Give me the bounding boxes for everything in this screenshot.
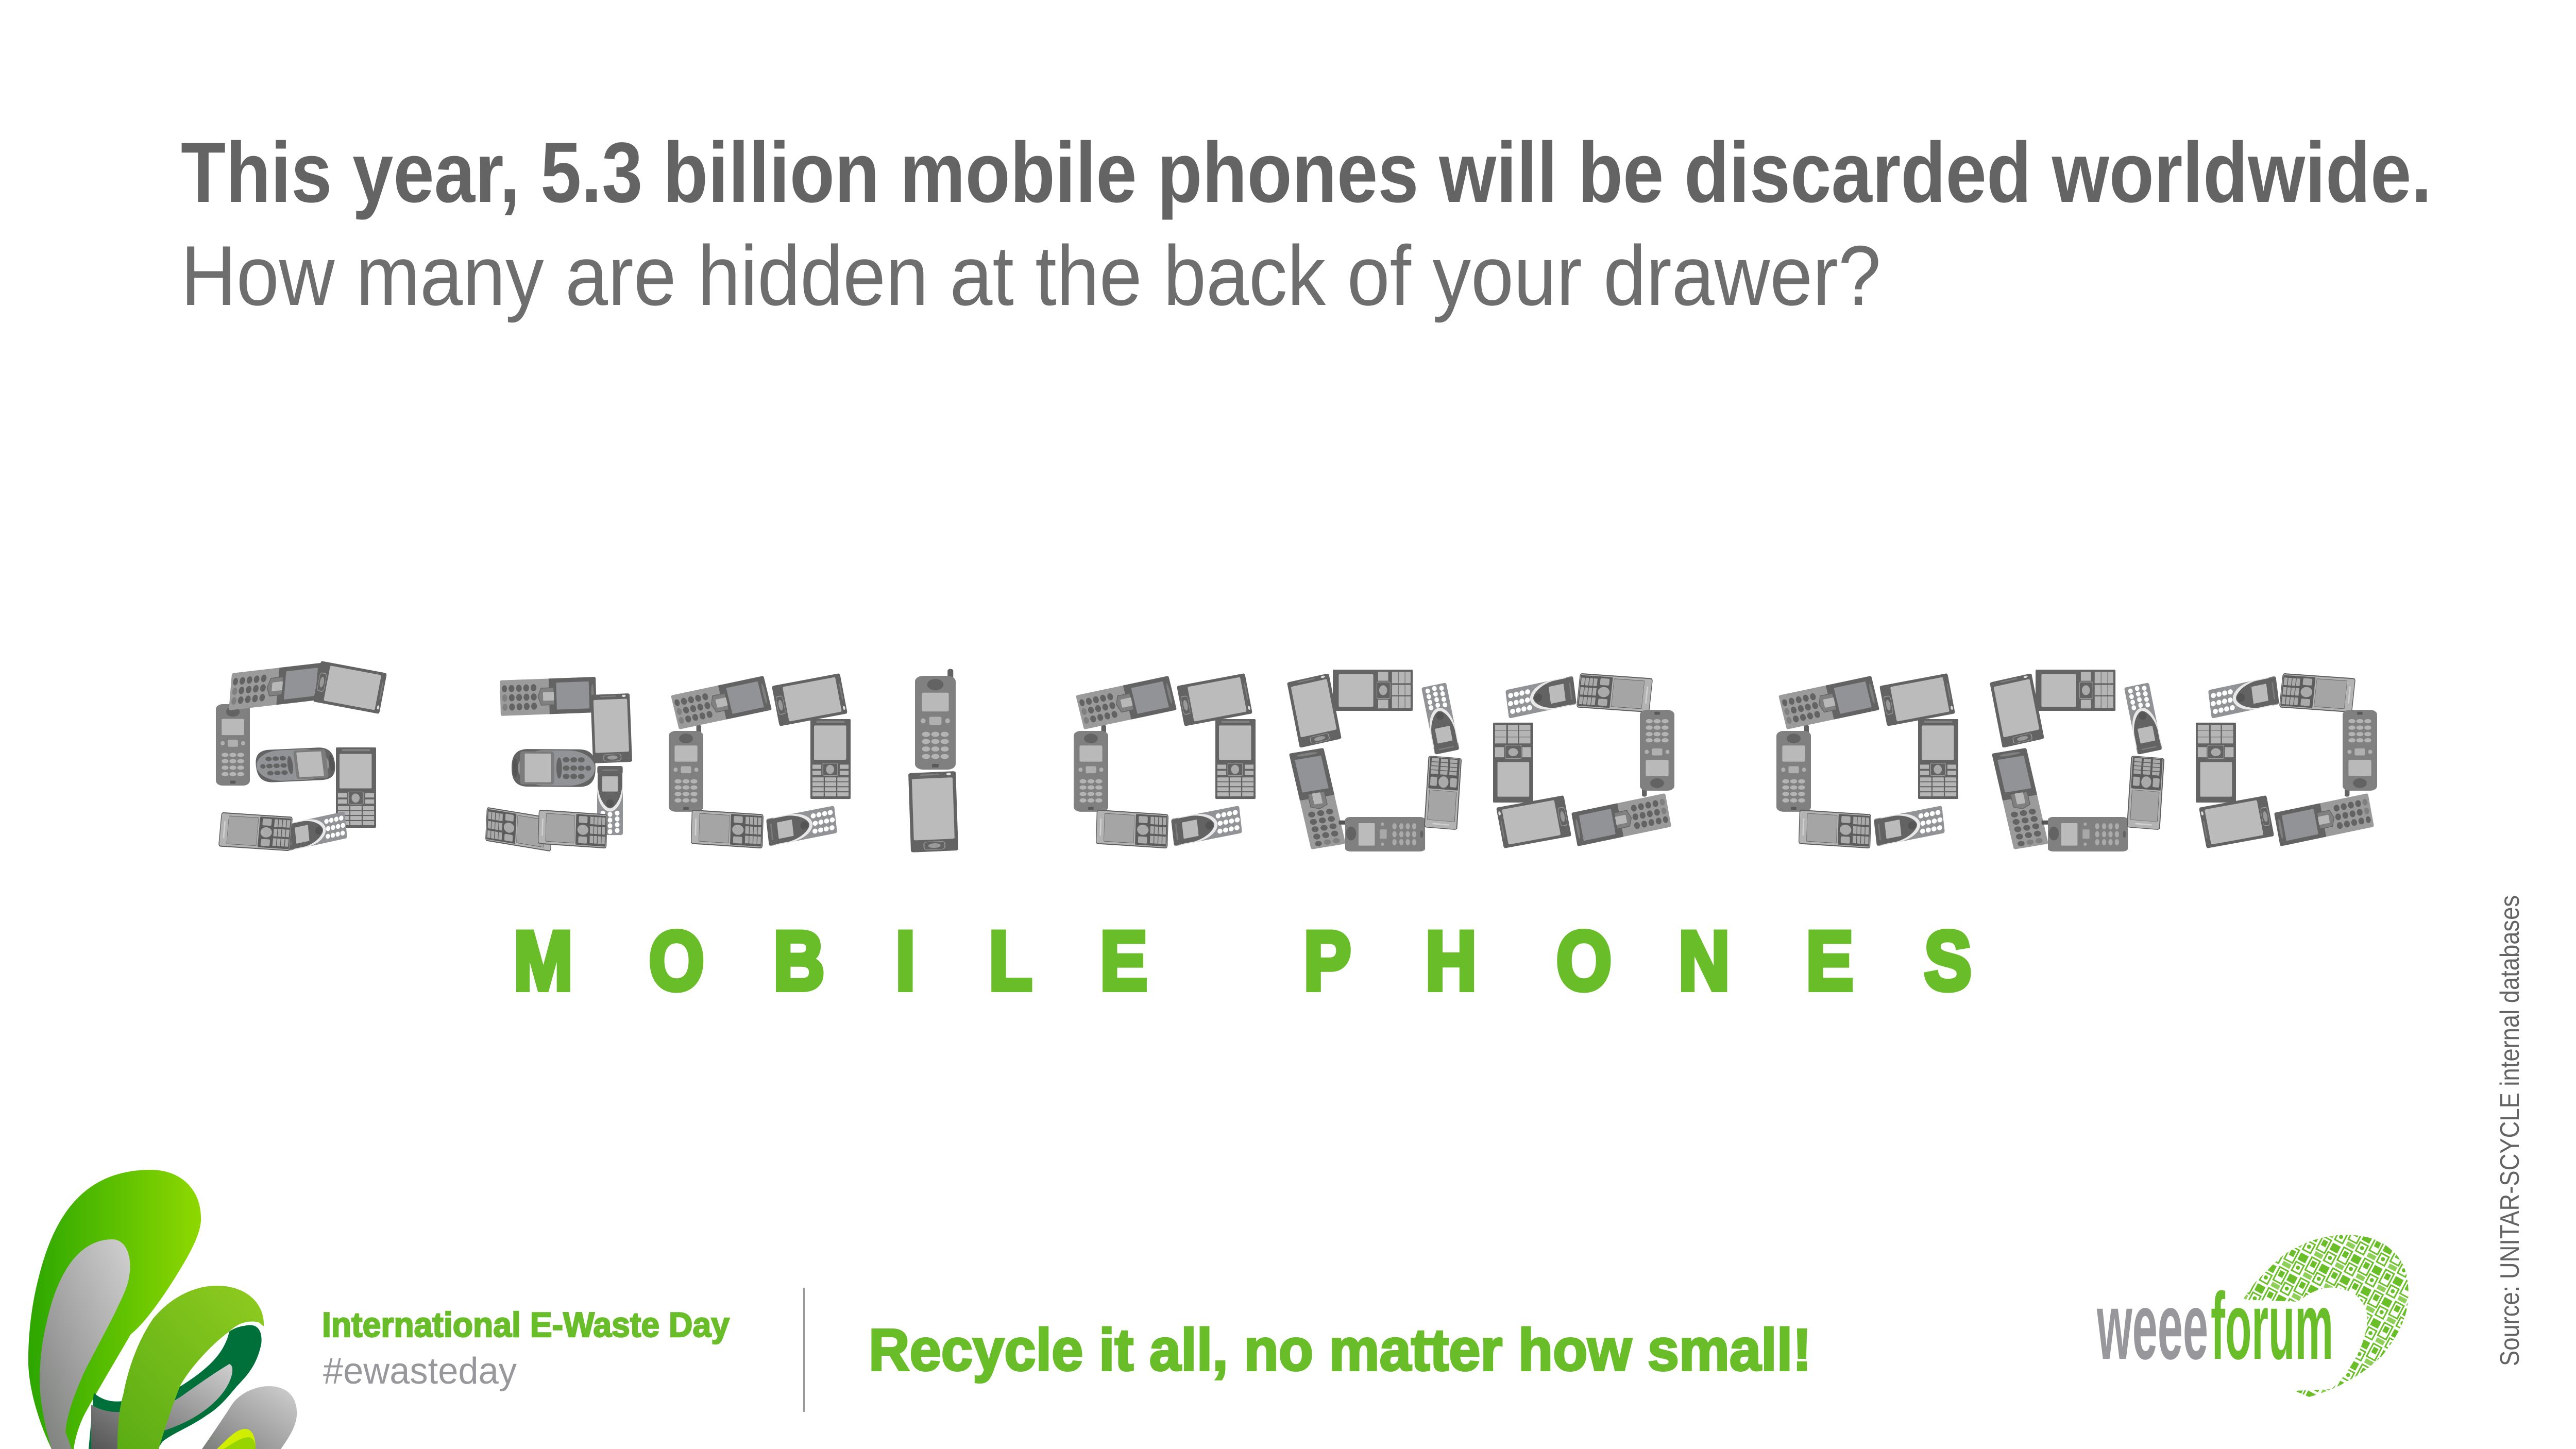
gray third blade — [202, 1386, 297, 1449]
digit 0, second thousands group middle — [1990, 670, 2164, 851]
digit 1 — [908, 669, 958, 853]
big green leaf — [28, 1170, 201, 1449]
phone: oval handset — [254, 747, 337, 783]
text: International E-Waste Day: International E-Waste Day — [322, 1305, 730, 1344]
lime tip inner — [224, 1437, 256, 1449]
label: MOBILE PHONES: MOBILE PHONES — [514, 914, 1972, 1007]
second green leaf — [117, 1286, 264, 1449]
slogan: Recycle it all, no matter how small! — [869, 1317, 1811, 1383]
icon: WEEE Forum logo — [2097, 1235, 2409, 1397]
phone: slider — [229, 662, 325, 710]
digit 0, second thousands group last — [2196, 674, 2377, 848]
digit 0 — [669, 673, 851, 848]
phone: slider — [500, 677, 597, 716]
phone: side keypad rear — [486, 808, 552, 851]
digit 0, second thousands group — [1776, 673, 1958, 848]
source note: Source: UNITAR-SCYCLE internal databases — [2495, 895, 2525, 1366]
number made of phones: 5 301 000 000 — [216, 661, 2377, 853]
lime tip — [217, 1429, 256, 1449]
digit 0, first thousands group middle — [1287, 670, 1461, 851]
gray ring interior — [91, 1364, 232, 1449]
phone: smartphone — [313, 661, 387, 714]
icon: WEEE Forum logo: forum — [2211, 1273, 2333, 1379]
dark green ring — [89, 1325, 262, 1449]
phone: smartphone — [590, 693, 632, 763]
phone: side keypad — [219, 813, 292, 850]
text: hashtag: #ewasteday — [323, 1351, 517, 1392]
phone: side keypad front — [538, 810, 607, 848]
subtitle: question: How many are hidden at the back of your drawer? — [181, 228, 1881, 323]
digit 3 — [486, 677, 632, 851]
phone: oval handset — [512, 749, 596, 787]
gray inner blade — [40, 1239, 130, 1449]
big green leaf fill — [28, 1170, 201, 1449]
icon: WEEE Forum logo: weee — [2097, 1273, 2208, 1379]
phone: nokia style — [597, 766, 623, 835]
icon: International E-Waste Day swirl logo — [28, 1170, 297, 1449]
icon: device swoosh — [2243, 1235, 2409, 1397]
phone: brick handset — [216, 698, 250, 786]
phone: brick handset — [915, 669, 956, 770]
phone: candy bar — [336, 747, 376, 828]
phone: nokia style — [285, 811, 347, 851]
digit 5 — [216, 661, 387, 851]
digit 0, first thousands group — [1074, 673, 1256, 848]
digit 0, first thousands group last — [1493, 674, 1674, 848]
phone: smartphone — [908, 771, 958, 853]
